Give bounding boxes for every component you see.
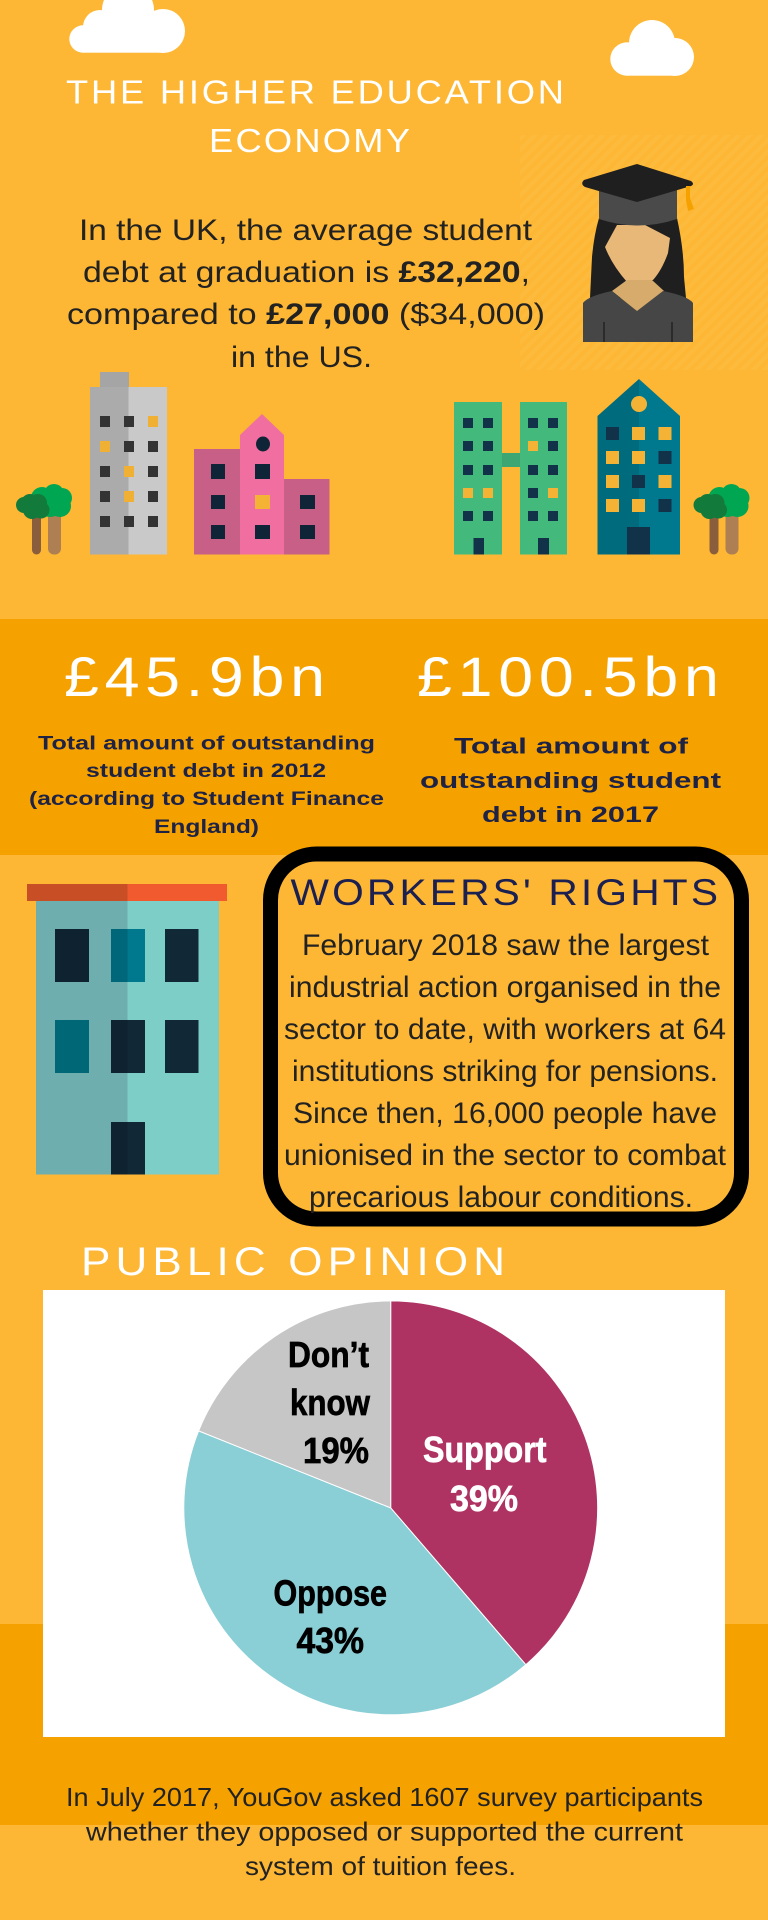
band: survey background: [0, 1624, 768, 1825]
icon: blue building: [598, 379, 680, 554]
slice: support: [391, 1301, 598, 1665]
panel: pie chart card: [43, 1290, 725, 1737]
icon: cloud left: [69, 0, 185, 53]
heading: workers' rights: WORKERS' RIGHTS: [291, 873, 718, 914]
label: don't know 19%: Don’t: [288, 1334, 369, 1375]
stat: 2012 debt: [29, 645, 384, 838]
icon: graduate: [582, 164, 694, 342]
stat: 2012 debt: (according to Student Finance: [29, 789, 384, 810]
text block: industrial action: Since then, 16,000 people have: [293, 1097, 717, 1130]
heading: public opinion: PUBLIC OPINION: [81, 1239, 505, 1284]
text block: average student debt: in the US.: [231, 341, 372, 374]
label: support 39%: Support: [423, 1429, 546, 1470]
stat: 2017 debt: outstanding student: [420, 768, 722, 793]
text block: survey note: system of tuition fees.: [245, 1851, 516, 1881]
stat: 2017 debt: debt in 2017: [482, 802, 659, 827]
stat: 2017 debt: Total amount of: [454, 734, 689, 758]
text block: average student debt: [67, 214, 545, 374]
text block: average student debt: debt at graduation is £32,220 ,: [83, 256, 530, 289]
text block: average student debt: compared to £27,000 ($34,000): [67, 298, 545, 331]
stat: 2012 debt: Total amount of outstanding: [38, 734, 375, 754]
text block: survey note: whether they opposed or supported the current: [85, 1816, 684, 1846]
icon: tree left: [16, 484, 72, 554]
icon: tree right: [694, 484, 750, 554]
slice: oppose: [184, 1431, 526, 1715]
callout border: [270, 854, 742, 1219]
label: don't know 19%: 19%: [303, 1430, 369, 1471]
title: THE HIGHER EDUCATION: [66, 75, 564, 111]
pie chart: [184, 1301, 598, 1715]
title: [66, 75, 564, 160]
icon: green twin towers: [454, 402, 567, 554]
text block: industrial action: institutions striking for pensions.: [292, 1055, 718, 1088]
text block: average student debt: In the UK, the average student: [79, 214, 533, 247]
label: oppose 43%: [274, 1572, 387, 1661]
text block: industrial action: February 2018 saw the largest: [302, 929, 709, 962]
icon: grey tower: [90, 372, 167, 554]
text block: industrial action: unionised in the sector to combat: [284, 1139, 726, 1172]
label: don't know 19%: know: [290, 1382, 371, 1423]
text block: industrial action: precarious labour conditions.: [309, 1181, 693, 1214]
panel: workers' rights: [270, 854, 742, 1219]
stat: 2017 debt: [417, 645, 722, 827]
label: support 39%: [423, 1429, 546, 1519]
stat: 2012 debt: England): [154, 817, 259, 838]
text block: survey note: [66, 1782, 703, 1881]
slice: don't know: [199, 1301, 391, 1508]
stat: 2017 debt: £100.5bn: [417, 645, 719, 708]
text block: industrial action: sector to date, with workers at 64: [284, 1013, 726, 1046]
text block: survey note: In July 2017, YouGov asked 1607 survey participants: [66, 1782, 703, 1812]
stat: 2012 debt: £45.9bn: [64, 645, 325, 708]
text block: industrial action: industrial action organised in the: [289, 971, 721, 1004]
label: oppose 43%: 43%: [296, 1620, 364, 1661]
label: oppose 43%: Oppose: [274, 1572, 387, 1614]
icon: office building: [27, 884, 227, 1174]
band: debt statistics background: [0, 619, 768, 855]
stat: 2012 debt: student debt in 2012: [86, 761, 326, 782]
text block: industrial action: [284, 929, 726, 1214]
label: support 39%: 39%: [450, 1478, 518, 1519]
icon: pink building: [194, 414, 330, 554]
title: ECONOMY: [209, 123, 410, 160]
icon: cloud right: [610, 20, 694, 76]
label: don't know 19%: [288, 1334, 371, 1471]
